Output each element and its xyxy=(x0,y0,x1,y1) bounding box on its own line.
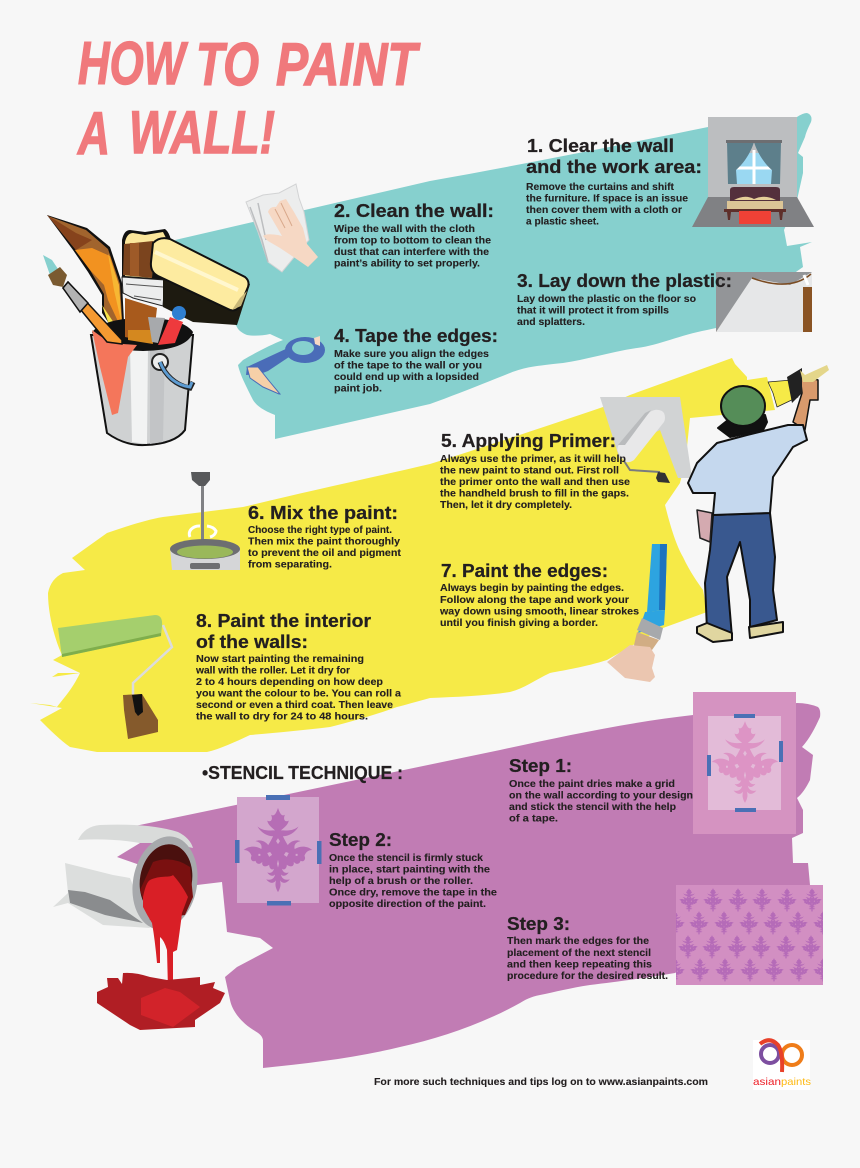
body: tape the edges xyxy=(334,348,489,394)
step 3 text xyxy=(517,271,732,328)
heading: stencil technique: •STENCIL TECHNIQUE : xyxy=(202,763,403,783)
heading: applying primer: 5. Applying Primer: xyxy=(441,431,616,451)
body: clean the wall: Wipe the wall with the cloth xyxy=(334,223,475,235)
stencil step 3 text xyxy=(507,914,668,982)
icon: painter with brush xyxy=(688,365,829,642)
body: stencil step 1: on the wall according to your design xyxy=(509,790,693,802)
coral paint drip xyxy=(92,330,137,415)
body: stencil step 3: Then mark the edges for the xyxy=(507,935,649,947)
heading: stencil step 2: Step 2: xyxy=(329,830,392,850)
heading: stencil step 1: Step 1: xyxy=(509,756,572,776)
icon: room with curtains and bed xyxy=(692,117,814,227)
body: paint the interior: the wall to dry for 24 to 48 hours. xyxy=(196,710,368,722)
icon: stencil step 1 on wall xyxy=(693,692,796,834)
legs and trousers xyxy=(705,513,777,637)
heading: lay down the plastic: 3. Lay down the plastic: xyxy=(517,271,732,291)
body: lay down the plastic: Lay down the plastic on the floor so xyxy=(517,293,696,305)
footer note: For more such techniques and tips log on to www.asianpaints.com xyxy=(374,1076,708,1088)
red pool xyxy=(97,973,225,1030)
body: applying primer: the handheld brush to fill in the gaps. xyxy=(440,488,629,500)
body: clean the wall: paint’s ability to set properly. xyxy=(334,258,480,270)
body: stencil step 2: Once the stencil is firmly stuck xyxy=(329,852,483,864)
stencil step 1 text xyxy=(509,756,693,824)
body: lay down the plastic: and splatters. xyxy=(517,316,585,328)
pouring red paint xyxy=(143,875,188,990)
body: lay down the plastic: that it will protect it from spills xyxy=(517,304,669,316)
body: paint the interior: you want the colour to be. You can roll a xyxy=(196,688,401,700)
icon: hand holding tape roll xyxy=(246,336,325,394)
title: WALL! xyxy=(129,99,275,166)
heading: clear the wall xyxy=(526,136,702,177)
heading: clear the wall: and the work area: xyxy=(526,157,702,177)
body: clear the wall: a plastic sheet. xyxy=(526,216,599,228)
body: stencil step 1: Once the paint dries make a grid xyxy=(509,778,675,790)
body: stencil step 1: of a tape. xyxy=(509,812,558,824)
body: applying primer xyxy=(440,453,630,511)
body: stencil step 2: opposite direction of the paint. xyxy=(329,898,486,910)
shirt xyxy=(688,425,807,515)
body: paint the edges xyxy=(439,582,639,629)
bristles and tools in bucket xyxy=(125,298,186,345)
step 5 text xyxy=(440,431,630,511)
icon: hand wiping with cloth xyxy=(246,184,318,272)
icon: repeated stencil pattern step 3 xyxy=(676,885,823,985)
icon: hand with blue brush xyxy=(607,544,667,682)
stencil step 2 text xyxy=(329,830,497,910)
panel: purple paint stroke xyxy=(117,703,820,1068)
body: clear the wall: then cover them with a cloth or xyxy=(526,204,682,216)
body: clean the wall: from top to bottom to clean the xyxy=(334,234,491,246)
body: clean the wall xyxy=(334,223,491,270)
flat brush xyxy=(122,229,171,306)
body: tape the edges: Make sure you align the edges xyxy=(334,348,489,360)
body: paint the edges: way down using smooth, linear strokes xyxy=(439,606,639,618)
body: tape the edges: paint job. xyxy=(334,382,382,394)
arm xyxy=(793,375,818,430)
step 4 text xyxy=(334,326,498,394)
logo: asian paints: asian xyxy=(753,1076,781,1088)
heading: paint the interior: of the walls: xyxy=(196,632,308,652)
body: clean the wall: dust that can interfere with the xyxy=(334,246,489,258)
body: applying primer: Always use the primer, as it will help xyxy=(440,453,626,465)
body: stencil step 3 xyxy=(507,935,668,982)
icon: plastic sheet on floor xyxy=(716,272,812,332)
can lower body xyxy=(53,863,150,928)
title: A xyxy=(77,100,110,167)
can rim xyxy=(125,831,205,935)
panel: yellow paint stroke xyxy=(30,358,775,752)
body: mix the paint: Then mix the paint thoroughly xyxy=(248,536,400,548)
bucket handle xyxy=(152,354,193,388)
body: paint the interior: 2 to 4 hours depending on how deep xyxy=(196,676,383,688)
wall brush xyxy=(768,365,829,407)
title: HOW xyxy=(78,30,188,97)
step 7 text xyxy=(439,561,639,629)
heading: paint the interior: 8. Paint the interior xyxy=(196,611,371,631)
step 6 text xyxy=(248,503,401,570)
body: stencil step 2: in place, start painting with the xyxy=(329,864,490,876)
body: applying primer: Then, let it dry completely. xyxy=(440,499,572,511)
body: applying primer: the primer onto the wall and then use xyxy=(440,476,630,488)
icon: drill mixing paint can xyxy=(170,472,240,570)
body: clear the wall xyxy=(526,181,688,228)
body: stencil step 2: Once dry, remove the tape in the xyxy=(329,886,497,898)
body: paint the edges: Follow along the tape and work your xyxy=(440,594,629,606)
heading: clean the wall: 2. Clean the wall: xyxy=(334,201,494,221)
icon: stencil step 2 xyxy=(235,795,322,906)
body: stencil step 1 xyxy=(509,778,693,824)
body: paint the interior xyxy=(195,653,401,722)
body: applying primer: the new paint to stand out. First roll xyxy=(440,464,619,476)
can interior xyxy=(134,840,198,920)
body: stencil step 3: placement of the next stencil xyxy=(507,947,651,959)
title: PAINT xyxy=(276,31,420,98)
body: tape the edges: could end up with a lopsided xyxy=(334,371,479,383)
body: tape the edges: of the tape to the wall or you xyxy=(334,360,482,372)
shoes xyxy=(697,622,783,642)
icon: tipped paint can with red spill xyxy=(53,825,225,1030)
logo: asian paints: paints xyxy=(781,1076,811,1088)
step 2 text xyxy=(334,201,494,270)
body: stencil step 3: procedure for the desired result. xyxy=(507,970,668,982)
body: paint the edges: Always begin by painting the edges. xyxy=(440,582,624,594)
body: paint the edges: until you finish giving a border. xyxy=(440,617,598,629)
body: lay down the plastic xyxy=(517,293,696,328)
bucket body xyxy=(91,318,193,445)
icon: green paint roller xyxy=(58,615,172,739)
body: paint the interior: wall with the roller. Let it dry for xyxy=(195,664,350,676)
body: stencil step 1: and stick the stencil with the help xyxy=(509,801,676,813)
logo: asian paints xyxy=(753,1040,811,1090)
body: paint the interior: second or even a third coat. Then leave xyxy=(196,699,393,711)
step 8 text xyxy=(195,611,401,722)
body: stencil step 2: help of a brush or the roller. xyxy=(329,875,473,887)
heading: mix the paint: 6. Mix the paint: xyxy=(248,503,398,523)
body: clear the wall: the furniture. If space is an issue xyxy=(526,192,688,204)
hair xyxy=(718,415,767,437)
heading: paint the edges: 7. Paint the edges: xyxy=(441,561,608,581)
heading: paint the interior xyxy=(196,611,371,652)
waist pouch xyxy=(697,510,712,542)
green cap xyxy=(721,386,765,426)
can top band xyxy=(78,825,193,848)
panel: teal paint stroke xyxy=(175,113,812,439)
heading: tape the edges: 4. Tape the edges: xyxy=(334,326,498,346)
yellow paint roller xyxy=(151,238,250,325)
icon: paint bucket with brushes and roller xyxy=(43,215,250,445)
heading: clear the wall: 1. Clear the wall xyxy=(527,136,674,156)
body: mix the paint: Choose the right type of paint. xyxy=(248,524,392,536)
title xyxy=(77,30,420,167)
heading: stencil step 3: Step 3: xyxy=(507,914,570,934)
small paint brush xyxy=(43,255,122,344)
body: mix the paint: from separating. xyxy=(248,558,332,570)
body: paint the interior: Now start painting the remaining xyxy=(196,653,364,665)
title: TO xyxy=(196,31,259,98)
step 1 text xyxy=(526,136,702,228)
body: stencil step 2 xyxy=(329,852,497,910)
body: clear the wall: Remove the curtains and shift xyxy=(526,181,674,193)
body: stencil step 3: and then keep repeating this xyxy=(507,958,652,970)
body: mix the paint: to prevent the oil and pigment xyxy=(248,547,401,559)
body: mix the paint xyxy=(248,524,401,570)
feather brush xyxy=(47,215,125,343)
icon: primer roller on grey patch xyxy=(600,397,692,483)
